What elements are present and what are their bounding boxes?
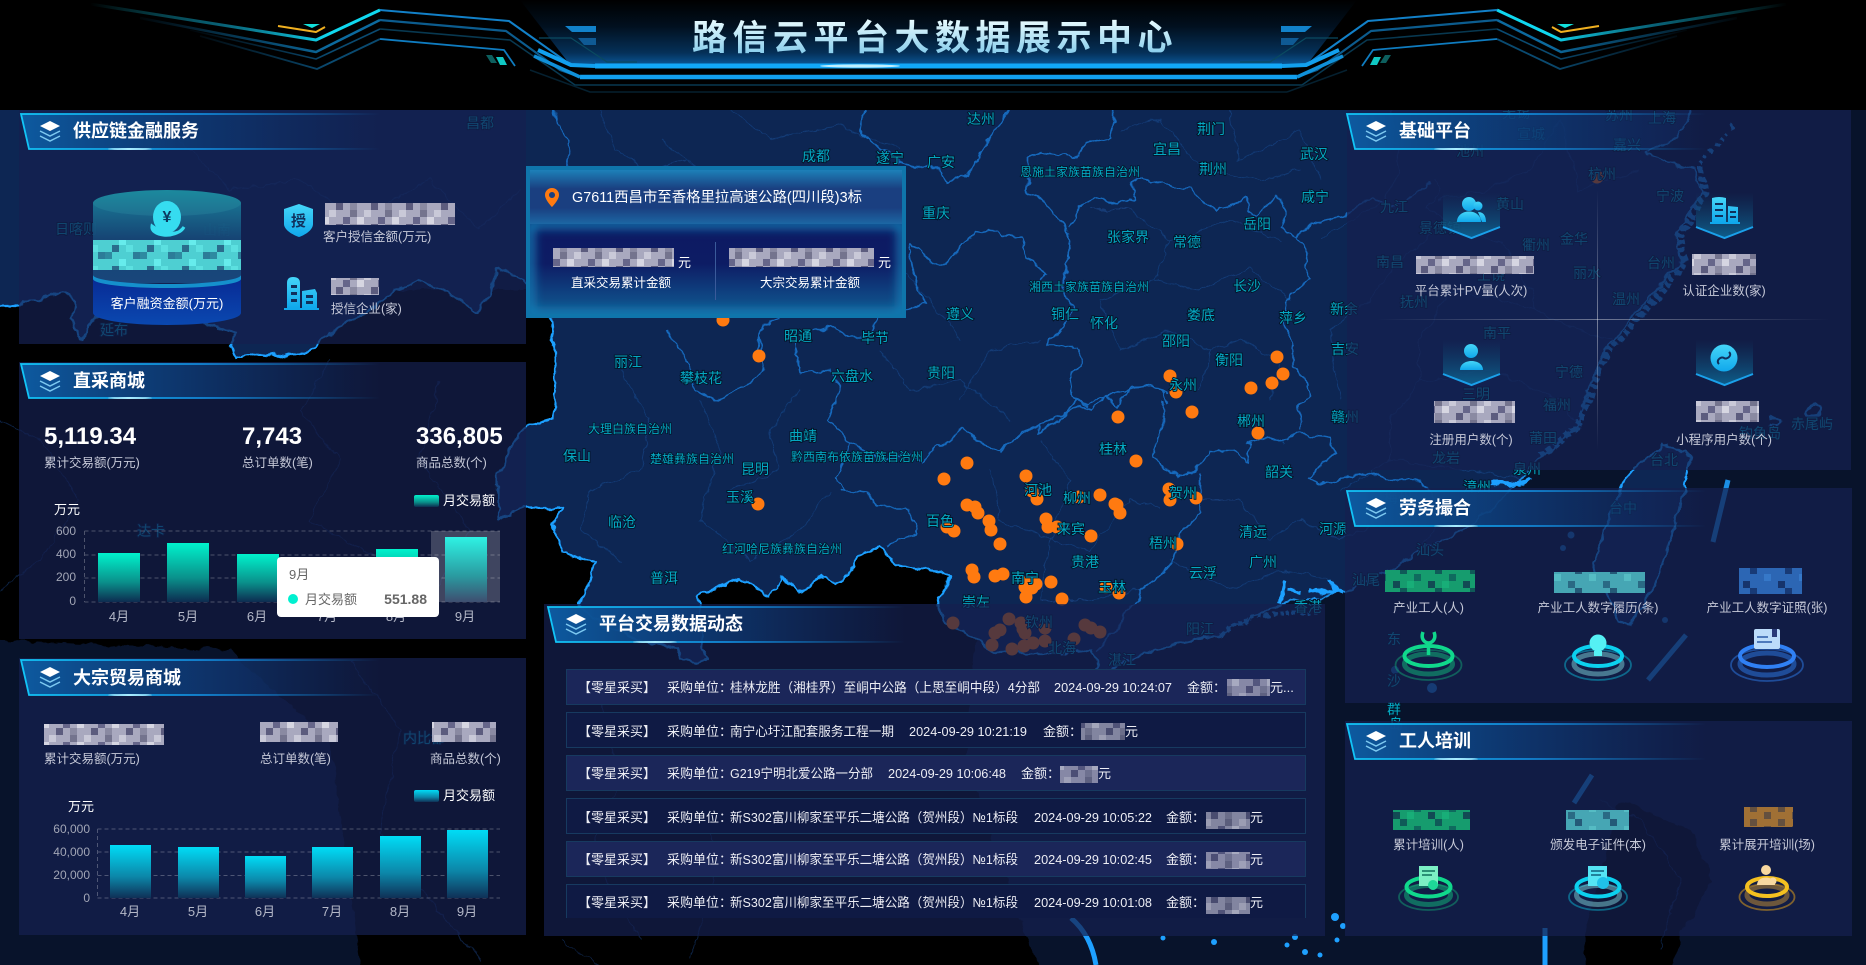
bar chart: monthly transactions: 8月 <box>390 904 410 919</box>
city labels: 新余 <box>1330 301 1358 317</box>
header left lines <box>90 4 1302 92</box>
city labels: 福州 <box>1543 397 1571 413</box>
city labels: 嘉兴 <box>1613 137 1641 153</box>
bar chart: monthly transactions: 4月 <box>109 609 129 624</box>
city labels: 贺州 <box>1169 485 1197 501</box>
stat: e-certificates issued <box>1550 810 1646 910</box>
city labels: 拉萨 <box>176 199 204 215</box>
header black background <box>0 0 1866 110</box>
panel: supply chain finance <box>19 110 526 344</box>
city labels: 黔西南布依族苗族自治州 <box>791 449 923 464</box>
provincial boundaries <box>550 100 1440 650</box>
city labels: 铜仁 <box>1051 306 1079 322</box>
coastline and islands <box>1207 100 1821 638</box>
panel: project info popup <box>526 166 906 318</box>
city labels: 无锡 <box>1502 105 1530 121</box>
feed row 3: 2024-09-29 10:06:48 <box>888 767 1006 781</box>
stat: bulk total: 元 <box>878 255 891 270</box>
stat: total orders <box>242 423 313 470</box>
panel background <box>1347 110 1851 470</box>
bar chart: monthly transactions: 40,000 <box>53 845 90 859</box>
philippines land <box>1585 800 1713 965</box>
city labels: 三明 <box>1462 386 1490 402</box>
panel header <box>21 114 380 150</box>
city labels: 贵港 <box>1071 554 1099 570</box>
stat: total orders: 7,743 <box>242 423 302 450</box>
stat: mini program users: 小程序用户数(个) <box>1676 432 1772 447</box>
icon: e-certificate ring <box>1569 866 1627 910</box>
feed row 6 <box>566 884 1306 918</box>
bar chart: monthly transactions: 20,000 <box>53 868 90 882</box>
city labels: 泉州 <box>1513 461 1541 477</box>
city labels: 楚雄彝族自治州 <box>650 451 734 466</box>
small islands <box>1160 532 1668 958</box>
feed row 1: 金额： <box>1187 680 1226 695</box>
city labels: 桂林 <box>1099 441 1127 457</box>
city labels: 攀枝花 <box>680 370 722 386</box>
stat: digital resumes: 产业工人数字履历(条) <box>1538 600 1658 615</box>
stat: direct purchase total: 直采交易累计金额 <box>571 275 671 290</box>
city labels: 玉溪 <box>726 489 754 505</box>
panel header <box>1347 114 1706 150</box>
feed row 2: 金额： <box>1043 724 1082 739</box>
panel background <box>19 110 526 344</box>
city labels: 保山 <box>563 448 591 464</box>
city labels: 遵义 <box>946 306 974 322</box>
bar chart: monthly transactions: 万元 <box>54 502 80 517</box>
panel header: 平台交易数据动态 <box>599 613 743 634</box>
city labels: 汕头 <box>1416 542 1444 558</box>
feed row 3: 金额： <box>1021 766 1060 781</box>
feed row 4: 【零星采买】 <box>578 810 656 825</box>
stat: digital certificates <box>1707 568 1827 681</box>
city labels: 普洱 <box>650 570 678 586</box>
icon: credit shield: 授 <box>291 213 306 230</box>
tooltip <box>277 557 439 617</box>
city labels: 六盘水 <box>831 368 873 384</box>
city labels: 黄山 <box>1496 196 1524 212</box>
city labels: 湛江 <box>1108 652 1136 668</box>
city labels: 钦州 <box>1025 614 1053 630</box>
feed row 1: 桂林龙胜（湘桂界）至峒中公路（上思至峒中段）4分部 <box>730 680 1040 695</box>
feed row 6: 采购单位： <box>667 895 732 910</box>
stat: direct purchase total: 元 <box>678 255 691 270</box>
city labels: 南平 <box>1483 325 1511 341</box>
stat: digital resumes <box>1538 572 1658 680</box>
stat: total transactions: 5,119.34 <box>44 423 137 450</box>
stat: industrial workers <box>1385 570 1475 680</box>
legend: 月交易额 <box>443 788 495 803</box>
legend <box>414 788 495 803</box>
stat: digital certificates: 产业工人数字证照(张) <box>1707 600 1827 615</box>
header right lines <box>1240 4 1787 92</box>
foreign land <box>0 290 1040 965</box>
panel header: 工人培训 <box>1399 730 1471 751</box>
city labels: 邵阳 <box>1162 333 1190 349</box>
city labels: 吉安 <box>1331 341 1359 357</box>
city labels: 来宾 <box>1057 521 1085 537</box>
feed row 3: 【零星采买】 <box>578 766 656 781</box>
icon: trainer ring <box>1740 865 1794 910</box>
city labels: 赤尾屿 <box>1791 416 1833 432</box>
city labels: 清远 <box>1239 524 1267 540</box>
bar chart: monthly transactions: 0 <box>69 594 76 608</box>
feed row 3: 元 <box>1098 766 1111 781</box>
bar chart: monthly transactions: 7月 <box>322 904 342 919</box>
city labels: 丽江 <box>614 354 642 370</box>
city labels: 咸宁 <box>1301 189 1329 205</box>
popup title bar <box>530 170 902 224</box>
header glow points <box>820 64 900 68</box>
stat: total transactions <box>44 724 164 766</box>
city labels: 宜昌 <box>1153 141 1181 157</box>
feed row 2: 元 <box>1125 724 1138 739</box>
city labels: 上海 <box>1648 110 1676 126</box>
icon: yen hand <box>152 201 184 235</box>
icon: wrench ring <box>1396 632 1462 680</box>
city labels: 东 <box>1387 631 1401 647</box>
panel header <box>21 364 380 399</box>
stat: trained workers: 累计培训(人) <box>1393 837 1464 852</box>
feed row 1: 【零星采买】 <box>578 680 656 695</box>
bar chart: monthly transactions: 6月 <box>247 609 267 624</box>
map markers <box>716 170 1604 656</box>
panel: platform transaction feed <box>544 604 1325 936</box>
panel: worker training <box>1345 721 1852 936</box>
stat: total goods <box>416 423 503 470</box>
stat: platform PV <box>1415 193 1534 298</box>
feed row 1: 2024-09-29 10:24:07 <box>1054 681 1172 695</box>
city labels: 漳州 <box>1463 479 1491 495</box>
city labels: 柳州 <box>1063 490 1091 506</box>
city labels: 上饶 <box>1477 267 1505 283</box>
city labels: 台北 <box>1650 452 1678 468</box>
stat: registered users <box>1429 340 1515 447</box>
bar chart: monthly transactions: 60,000 <box>53 822 90 836</box>
stat: bulk total <box>729 248 891 290</box>
city labels: 韶关 <box>1265 464 1293 480</box>
stat: direct purchase total <box>553 248 691 290</box>
city labels: 荆门 <box>1197 121 1225 137</box>
city labels: 九江 <box>1380 199 1408 215</box>
icon: buildings <box>284 277 319 310</box>
city labels: 成都 <box>802 148 830 164</box>
feed row 6: 【零星采买】 <box>578 895 656 910</box>
bar chart: monthly transactions: 5月 <box>178 609 198 624</box>
stat: certified companies: 认证企业数(家) <box>1682 283 1766 298</box>
legend <box>414 493 495 508</box>
city labels: 贵阳 <box>927 365 955 381</box>
city labels: 恩施土家族苗族自治州 <box>1020 164 1140 179</box>
city labels: 荆州 <box>1199 161 1227 177</box>
city labels: 苏州 <box>1605 107 1633 123</box>
city labels: 台中 <box>1609 500 1637 516</box>
stat: total transactions: 累计交易额(万元) <box>44 455 140 470</box>
stat: mini program users <box>1676 340 1772 447</box>
city labels: 岛 <box>1389 716 1403 732</box>
city labels: 岳阳 <box>1243 216 1271 232</box>
stat: total transactions: 累计交易额(万元) <box>44 751 140 766</box>
panel header: 大宗贸易商城 <box>73 667 181 688</box>
stat: total transactions <box>44 423 140 470</box>
panel: labor matching <box>1345 488 1852 703</box>
city labels: 长沙 <box>1233 278 1261 294</box>
stat: training sessions <box>1719 807 1815 910</box>
city labels: 临沧 <box>608 514 636 530</box>
city labels: 郴州 <box>1237 413 1265 429</box>
feed row 5: 2024-09-29 10:02:45 <box>1034 853 1152 867</box>
panel header: 劳务撮合 <box>1399 497 1471 518</box>
stat: certified companies <box>1682 193 1766 298</box>
city labels: 南宁 <box>1011 570 1039 586</box>
stat: bulk total: 大宗交易累计金额 <box>760 275 860 290</box>
city labels: 汕尾 <box>1352 572 1380 588</box>
feed row 3: G219宁明北爱公路一分部 <box>730 766 873 781</box>
legend: 月交易额 <box>443 493 495 508</box>
city labels: 达卡 <box>137 523 165 539</box>
city labels: 莆田 <box>1529 430 1557 446</box>
city labels: 龙岩 <box>1432 450 1460 466</box>
stat: trained workers <box>1393 810 1470 910</box>
city labels: 张家界 <box>1107 229 1149 245</box>
city labels: 湘西土家族苗族自治州 <box>1029 279 1149 294</box>
popup body <box>526 166 906 318</box>
city labels: 北海 <box>1048 640 1076 656</box>
china land <box>0 100 1701 680</box>
bar chart: monthly transactions: 9月 <box>457 904 477 919</box>
bar chart: monthly transactions: 9月 <box>455 609 475 624</box>
city labels: 宣城 <box>1517 126 1545 142</box>
city labels: 温州 <box>1612 291 1640 307</box>
city labels: 衡阳 <box>1215 352 1243 368</box>
feed row 5: 金额： <box>1166 852 1205 867</box>
feed row 2 <box>566 712 1306 748</box>
icon: certificate ring <box>1399 866 1458 910</box>
feed row 5: 【零星采买】 <box>578 852 656 867</box>
feed row 4: 采购单位： <box>667 810 732 825</box>
stat: e-certificates issued: 颁发电子证件(本) <box>1550 837 1646 852</box>
feed row 4: 金额： <box>1166 810 1205 825</box>
bar chart: monthly transactions: 0 <box>83 891 90 905</box>
feed row 5: 采购单位： <box>667 852 732 867</box>
city labels: 永州 <box>1169 377 1197 393</box>
city labels: 萍乡 <box>1279 310 1307 326</box>
city labels: 广安 <box>927 154 955 170</box>
tooltip: 月交易额 <box>305 592 357 607</box>
bar chart: monthly transactions: 8月 <box>386 609 406 624</box>
feed row 1: 采购单位： <box>667 680 732 695</box>
icon: bulb ring <box>1565 634 1631 680</box>
city labels: 娄底 <box>1187 307 1215 323</box>
bar chart: monthly transactions: 600 <box>56 524 76 538</box>
stat: total orders: 总订单数(笔) <box>242 455 313 470</box>
stat: customer credit amount: 客户授信金额(万元) <box>323 229 431 244</box>
city labels: 日喀则 <box>55 221 97 237</box>
city labels: 山南 <box>203 222 231 238</box>
header left accents <box>303 24 320 28</box>
feed row 4: 元 <box>1250 810 1263 825</box>
city labels: 金华 <box>1560 231 1588 247</box>
national border <box>0 268 1207 680</box>
city labels: 阳江 <box>1186 621 1214 637</box>
tooltip: 551.88 <box>384 591 427 607</box>
stat: total goods <box>430 722 501 766</box>
feed row 1 <box>566 670 1306 704</box>
city labels: 昭通 <box>784 328 812 344</box>
cylinder: financing amount <box>93 190 241 325</box>
cylinder: financing amount: 客户融资金额(万元) <box>111 296 223 311</box>
city labels: 台州 <box>1647 255 1675 271</box>
panel header <box>1347 491 1706 527</box>
stat: total orders <box>260 722 338 766</box>
panel header <box>1347 724 1706 760</box>
city labels: 衢州 <box>1522 237 1550 253</box>
city labels: 宁波 <box>1656 188 1684 204</box>
city labels: 重庆 <box>922 205 950 221</box>
stat: credited companies <box>331 278 402 316</box>
city labels: 常德 <box>1173 234 1201 250</box>
panel header: 供应链金融服务 <box>73 120 199 141</box>
city labels: 赣州 <box>1331 409 1359 425</box>
city labels: 杭州 <box>1588 166 1616 182</box>
panel: base platform <box>1347 110 1851 470</box>
city labels: 群 <box>1387 701 1401 717</box>
tooltip: 9月 <box>289 567 309 582</box>
stat: registered users: 注册用户数(个) <box>1429 432 1513 447</box>
panel header <box>548 607 905 643</box>
icon: credit shield <box>284 204 313 237</box>
city labels: 怀化 <box>1090 315 1118 331</box>
stat: platform PV: 平台累计PV量(人次) <box>1415 283 1527 298</box>
city labels <box>55 105 1833 746</box>
city labels: 抚州 <box>1400 294 1428 310</box>
city labels: 昌都 <box>466 115 494 131</box>
city labels: 景德镇 <box>1419 220 1461 236</box>
city labels: 香港 <box>1294 599 1322 615</box>
feed row 3: 采购单位： <box>667 766 732 781</box>
bar chart: monthly transactions: 7月 <box>317 609 337 624</box>
feed row 4: 新S302富川柳家至平乐二塘公路（贺州段）№1标段 <box>730 810 1018 825</box>
city labels: 梅州 <box>1384 490 1412 506</box>
bar chart: monthly transactions: 4月 <box>120 904 140 919</box>
bar chart: monthly transactions: 400 <box>56 547 76 561</box>
icon: card ring <box>1731 629 1803 681</box>
panel background <box>1345 721 1852 936</box>
city labels: 云浮 <box>1189 565 1217 581</box>
icon: yen hand: ¥ <box>163 209 172 226</box>
bar chart: monthly transactions: 200 <box>56 570 76 584</box>
title: 路信云平台大数据展示中心 <box>692 19 1178 58</box>
panel background <box>544 604 1325 936</box>
panel header <box>21 660 380 696</box>
feed row 1: 元... <box>1270 680 1294 695</box>
city labels: 池州 <box>1456 143 1484 159</box>
feed row 3 <box>566 756 1306 790</box>
city labels: 昆明 <box>741 461 769 477</box>
feed row 6: 2024-09-29 10:01:08 <box>1034 896 1152 910</box>
city labels: 达州 <box>967 111 995 127</box>
panel background <box>19 658 526 935</box>
feed row 6: 元 <box>1250 895 1263 910</box>
panel: direct purchase mall <box>19 362 526 639</box>
city labels: 遂宁 <box>876 150 904 166</box>
city labels: 红河哈尼族彝族自治州 <box>722 541 842 556</box>
bar chart: monthly transactions <box>54 502 500 624</box>
city labels: 河池 <box>1024 482 1052 498</box>
divider cross <box>1597 190 1598 450</box>
stat: total goods: 商品总数(个) <box>430 751 501 766</box>
city labels: 宁德 <box>1555 364 1583 380</box>
stat: credited companies: 授信企业(家) <box>331 301 402 316</box>
feed row 5: 元 <box>1250 852 1263 867</box>
feed row 5: 新S302富川柳家至平乐二塘公路（贺州段）№1标段 <box>730 852 1018 867</box>
feed row 4 <box>566 798 1306 834</box>
feed row 2: 采购单位： <box>667 724 732 739</box>
city labels: 河源 <box>1319 521 1347 537</box>
bar chart: monthly transactions: 万元 <box>68 799 94 814</box>
panel background <box>1345 488 1852 703</box>
city labels: 曲靖 <box>789 428 817 444</box>
city labels: 沙 <box>1387 673 1401 689</box>
feed row 5 <box>566 842 1306 876</box>
feed row 6: 新S302富川柳家至平乐二塘公路（贺州段）№1标段 <box>730 895 1018 910</box>
city labels: 百色 <box>926 513 954 529</box>
stat: customer credit amount <box>323 203 455 244</box>
city labels: 延布 <box>100 322 128 338</box>
city labels: 玉林 <box>1098 579 1126 595</box>
stat: industrial workers: 产业工人(人) <box>1393 601 1464 615</box>
nine dash line <box>1071 480 1728 965</box>
city labels: 内比都 <box>403 730 445 746</box>
city labels: 武汉 <box>1300 146 1328 162</box>
popup title bar: G7611西昌市至香格里拉高速公路(四川段)3标 <box>572 189 862 206</box>
bar chart: monthly transactions <box>53 799 500 919</box>
bar chart: monthly transactions: 5月 <box>188 904 208 919</box>
stat: training sessions: 累计展开培训(场) <box>1719 837 1815 852</box>
city labels: 南昌 <box>1376 254 1404 270</box>
feed row 2: 2024-09-29 10:21:19 <box>909 725 1027 739</box>
stat: total goods: 商品总数(个) <box>416 455 487 470</box>
panel header: 直采商城 <box>73 370 145 391</box>
city labels: 丽水 <box>1573 265 1601 281</box>
city labels: 梧州 <box>1149 535 1177 551</box>
panel header: 基础平台 <box>1399 120 1471 141</box>
feed row 2: 【零星采买】 <box>578 724 656 739</box>
header decoration <box>0 0 1866 110</box>
panel: bulk trade mall <box>19 658 526 935</box>
panel background <box>19 362 526 639</box>
bar chart: monthly transactions: 6月 <box>255 904 275 919</box>
city labels: 广州 <box>1249 554 1277 570</box>
city labels: 钓鱼岛 <box>1739 425 1781 441</box>
stat: total orders: 总订单数(笔) <box>260 751 331 766</box>
city labels: 崇左 <box>962 594 990 610</box>
feed row 4: 2024-09-29 10:05:22 <box>1034 811 1152 825</box>
city labels: 毕节 <box>861 330 889 346</box>
header central glow <box>520 0 1357 66</box>
feed row 6: 金额： <box>1166 895 1205 910</box>
city level boundaries <box>0 110 1680 965</box>
stat: total goods: 336,805 <box>416 423 503 450</box>
city labels: 大理白族自治州 <box>588 421 672 436</box>
feed row 2: 南宁心圩江配套服务工程一期 <box>730 724 894 739</box>
taiwan <box>1593 443 1691 625</box>
